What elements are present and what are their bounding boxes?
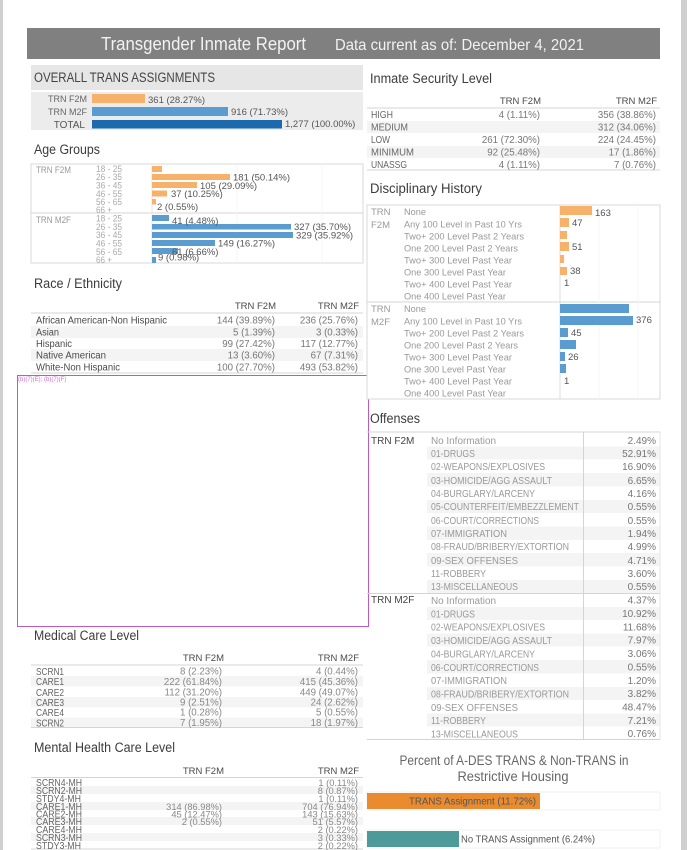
group: TRN M2F discipline: Two+ 200 Level Past 2 Years xyxy=(404,328,524,340)
table: medical care level: TRN F2M xyxy=(183,653,224,664)
group: TRN M2F discipline: Two+ 300 Level Past Year xyxy=(404,352,512,364)
group: TRN F2M ages xyxy=(36,164,290,216)
group: TRN F2M offenses: 2.49% xyxy=(628,436,656,447)
table: mental health care level: 2 (0.55%) xyxy=(182,817,222,827)
group: TRN M2F offenses: 4.37% xyxy=(628,596,656,606)
group: TRN F2M offenses: 11-ROBBERY xyxy=(431,569,486,580)
group: TRN M2F offenses: 10.92% xyxy=(622,609,656,620)
group: TRN F2M offenses: 02-WEAPONS/EXPLOSIVES xyxy=(431,462,545,473)
group: TRN F2M ages: 56 - 65 xyxy=(96,197,122,208)
table: race / ethnicity: 144 (39.89%) xyxy=(217,316,275,326)
group: TRN M2F ages: 9 (0.98%) xyxy=(158,252,199,264)
group: TRN F2M ages: 66 + xyxy=(96,205,112,216)
heading: percent in restrictive housing: Restrictive Housing xyxy=(458,769,568,784)
table: inmate security level: TRN M2F xyxy=(616,96,657,107)
table: medical care level: SCRN1 xyxy=(36,666,64,678)
table: mental health care level: 51 (5.57%) xyxy=(313,817,358,827)
group: TRN M2F discipline: M2F xyxy=(371,317,390,328)
group: TRN M2F discipline: 26 xyxy=(568,352,579,363)
group: TRN F2M offenses: 0.55% xyxy=(628,582,656,593)
table: medical care level: 5 (0.55%) xyxy=(316,708,358,718)
table: race / ethnicity: TRN M2F xyxy=(318,301,359,312)
heading: age groups: Age Groups xyxy=(34,142,100,157)
table: mental health care level: CARE3-MH xyxy=(36,816,82,828)
title banner xyxy=(27,28,660,59)
table: inmate security level: 224 (24.45%) xyxy=(598,135,656,146)
group: TRN F2M discipline: 51 xyxy=(572,242,583,253)
table: inmate security level: 4 (1.11%) xyxy=(499,160,540,171)
table: mental health care level: 143 (15.63%) xyxy=(302,810,358,820)
table: medical care level: 112 (31.20%) xyxy=(165,688,222,698)
group: TRN M2F offenses: 03-HOMICIDE/AGG ASSAULT xyxy=(431,636,552,647)
table: mental health care level: 1 (0.11%) xyxy=(318,794,358,804)
group: TRN F2M ages: 18 - 25 xyxy=(96,164,122,175)
table: inmate security level: LOW xyxy=(371,134,390,146)
group: TRN F2M offenses: 08-FRAUD/BRIBERY/EXTORTION xyxy=(431,542,569,553)
group: TRN F2M ages: 181 (50.14%) xyxy=(233,172,290,184)
group: TRN M2F offenses: 48.47% xyxy=(622,702,656,714)
table: medical care level: CARE4 xyxy=(36,707,64,719)
group: TRN F2M offenses: 6.65% xyxy=(628,476,656,487)
group: TRN M2F offenses: 11-ROBBERY xyxy=(431,716,486,727)
group: TRN M2F ages: 56 - 65 xyxy=(96,247,122,258)
table: mental health care level: TRN M2F xyxy=(318,766,359,777)
table: mental health care level: SCRN3-MH xyxy=(36,832,82,844)
group: TRN M2F offenses: 13-MISCELLANEOUS xyxy=(431,730,518,740)
group: TRN M2F discipline: TRN xyxy=(371,304,391,315)
table: race / ethnicity: African American-Non Hispanic xyxy=(36,316,167,326)
bar: TRN F2M: 361 (28.27%) xyxy=(148,95,205,106)
group: TRN F2M discipline xyxy=(371,206,611,302)
redacted area xyxy=(18,376,368,626)
group: TRN M2F ages: 26 - 35 xyxy=(96,222,122,233)
table: mental health care level: STDY4-MH xyxy=(36,793,81,805)
table: inmate security level: HIGH xyxy=(371,109,393,121)
bar: total: 1,277 (100.00%) xyxy=(285,119,355,130)
group: TRN F2M discipline: TRN xyxy=(371,207,391,218)
table: race / ethnicity: 236 (25.76%) xyxy=(300,316,358,326)
table: inmate security level: UNASSG xyxy=(371,159,407,171)
bar: no TRANS assignment: No TRANS Assignment (6.24%) xyxy=(461,834,595,846)
table: medical care level: 9 (2.51%) xyxy=(180,698,222,708)
group: TRN F2M discipline: Two+ 300 Level Past Year xyxy=(404,256,512,266)
group: TRN F2M discipline: 163 xyxy=(595,208,611,219)
heading: overall trans assignments: OVERALL TRANS ASSIGNMENTS xyxy=(34,70,215,85)
group: TRN F2M ages: 46 - 55 xyxy=(96,189,122,200)
group: TRN F2M discipline: 38 xyxy=(570,266,581,277)
table: inmate security level xyxy=(367,96,660,171)
group: TRN F2M offenses: 05-COUNTERFEIT/EMBEZZLEMENT xyxy=(431,502,579,513)
group: TRN F2M discipline: One 400 Level Past Year xyxy=(404,292,506,302)
group: TRN F2M discipline: None xyxy=(404,207,426,218)
group: TRN F2M offenses: 01-DRUGS xyxy=(431,449,475,460)
table: medical care level: 415 (45.36%) xyxy=(300,677,358,688)
group: TRN F2M ages: 26 - 35 xyxy=(96,172,122,183)
table: medical care level: 18 (1.97%) xyxy=(311,718,358,729)
bar chart: restrictive housing xyxy=(367,792,660,848)
group: TRN M2F discipline: One 300 Level Past Year xyxy=(404,364,506,376)
bar: TRANS assignment: TRANS Assignment (11.72%) xyxy=(409,796,536,808)
group: TRN F2M offenses: 0.55% xyxy=(628,516,656,527)
group: TRN F2M offenses: 13-MISCELLANEOUS xyxy=(431,582,518,593)
table: medical care level: 449 (49.07%) xyxy=(300,688,358,698)
table: mental health care level: CARE2-MH xyxy=(36,808,82,820)
panel: disciplinary history chart xyxy=(367,205,660,400)
group: TRN F2M discipline: One 300 Level Past Year xyxy=(404,268,506,278)
table: race / ethnicity: 5 (1.39%) xyxy=(233,328,275,338)
group: TRN M2F ages: 46 - 55 xyxy=(96,238,122,250)
table: inmate security level: 92 (25.48%) xyxy=(487,148,540,158)
group: TRN F2M offenses: 0.55% xyxy=(628,502,656,513)
table: inmate security level: 4 (1.11%) xyxy=(499,110,540,121)
bar: no TRANS assignment xyxy=(367,831,595,847)
group: TRN M2F offenses: TRN M2F xyxy=(371,595,414,606)
bar: TRANS assignment xyxy=(367,793,540,809)
group: TRN F2M ages: 2 (0.55%) xyxy=(157,202,198,213)
table: medical care level: 7 (1.95%) xyxy=(180,718,222,729)
bar: total xyxy=(54,119,355,131)
bar: TRN M2F xyxy=(48,107,288,118)
group: TRN M2F offenses: 3.82% xyxy=(628,689,656,700)
group: TRN M2F ages: TRN M2F xyxy=(36,215,71,226)
group: TRN F2M offenses xyxy=(371,436,656,593)
table: mental health care level: TRN F2M xyxy=(183,766,224,777)
bar: TRN M2F: TRN M2F xyxy=(48,107,87,117)
group: TRN M2F offenses: No Information xyxy=(431,596,496,607)
group: TRN F2M discipline: Any 100 Level in Past 10 Yrs xyxy=(404,220,522,230)
table: inmate security level: MINIMUM xyxy=(371,146,414,158)
group: TRN M2F discipline: Any 100 Level in Past 10 Yrs xyxy=(404,316,522,328)
group: TRN F2M discipline: 47 xyxy=(572,218,583,229)
group: TRN F2M discipline: Two+ 400 Level Past Year xyxy=(404,280,512,290)
table: mental health care level: CARE4-MH xyxy=(36,824,82,836)
group: TRN M2F offenses: 04-BURGLARY/LARCENY xyxy=(431,650,535,660)
group: TRN M2F offenses: 11.68% xyxy=(623,622,656,634)
group: TRN M2F discipline xyxy=(371,304,652,400)
group: TRN M2F ages xyxy=(36,214,353,266)
table: medical care level: CARE1 xyxy=(36,676,64,688)
heading: percent in restrictive housing: Percent of A-DES TRANS & Non-TRANS in xyxy=(400,753,628,768)
group: TRN F2M discipline: One 200 Level Past 2 Years xyxy=(404,244,518,254)
group: TRN M2F offenses: 02-WEAPONS/EXPLOSIVES xyxy=(431,622,545,634)
group: TRN F2M ages: 105 (29.09%) xyxy=(200,181,257,192)
group: TRN M2F discipline: 376 xyxy=(636,315,652,326)
table: inmate security level: MEDIUM xyxy=(371,122,408,134)
table: mental health care level: 3 (0.33%) xyxy=(318,833,358,843)
group: TRN M2F discipline: None xyxy=(404,304,426,315)
group: TRN F2M offenses: 3.60% xyxy=(628,569,656,580)
table: race / ethnicity: 67 (7.31%) xyxy=(311,350,358,362)
heading: offenses: Offenses xyxy=(370,411,420,426)
table: inmate security level: 356 (38.86%) xyxy=(598,110,656,121)
table: inmate security level: 7 (0.76%) xyxy=(614,160,656,171)
table: inmate security level: 312 (34.06%) xyxy=(598,122,656,134)
table: mental health care level: 314 (86.98%) xyxy=(166,802,222,812)
title banner: Data current as of: December 4, 2021 xyxy=(335,37,584,54)
heading: race / ethnicity: Race / Ethnicity xyxy=(34,276,122,291)
group: TRN M2F discipline: 1 xyxy=(564,376,569,387)
table: race / ethnicity: 493 (53.82%) xyxy=(300,362,358,374)
group: TRN M2F offenses: 7.21% xyxy=(628,716,656,727)
group: TRN M2F offenses: 07-IMMIGRATION xyxy=(431,676,507,687)
group: TRN M2F offenses: 01-DRUGS xyxy=(431,610,475,620)
table: medical care level: 4 (0.44%) xyxy=(316,666,358,678)
heading: disciplinary history: Disciplinary History xyxy=(370,181,482,196)
heading: medical care level: Medical Care Level xyxy=(34,628,139,643)
table: race / ethnicity xyxy=(31,301,363,374)
group: TRN M2F offenses: 1.20% xyxy=(628,676,656,687)
group: TRN F2M offenses: 16.90% xyxy=(622,462,656,473)
table: race / ethnicity: Hispanic xyxy=(36,339,72,350)
table: race / ethnicity: TRN F2M xyxy=(235,301,276,312)
table: inmate security level: TRN F2M xyxy=(500,96,541,107)
group: TRN F2M offenses: 07-IMMIGRATION xyxy=(431,529,507,540)
table: inmate security level: 261 (72.30%) xyxy=(482,135,540,146)
group: TRN M2F offenses: 3.06% xyxy=(628,649,656,660)
table: medical care level xyxy=(31,653,363,730)
group: TRN M2F offenses: 0.55% xyxy=(628,662,656,674)
table: medical care level: 8 (2.23%) xyxy=(180,666,222,678)
group: TRN M2F ages: 149 (16.27%) xyxy=(218,238,275,250)
table: mental health care level: SCRN2-MH xyxy=(36,785,82,797)
group: TRN M2F ages: 61 (6.66%) xyxy=(172,247,218,258)
group: TRN M2F ages: 41 (4.48%) xyxy=(172,216,218,227)
group: TRN M2F offenses xyxy=(371,595,656,740)
table: race / ethnicity: White-Non Hispanic xyxy=(36,362,120,374)
table: medical care level: TRN M2F xyxy=(318,653,359,664)
table: mental health care level: 704 (76.94%) xyxy=(302,802,358,812)
table: mental health care level xyxy=(31,766,363,850)
panel: overall trans assignments xyxy=(31,65,363,131)
group: TRN F2M offenses: 4.99% xyxy=(628,542,656,553)
table: race / ethnicity: 3 (0.33%) xyxy=(316,328,358,338)
table: race / ethnicity: 13 (3.60%) xyxy=(228,350,275,362)
group: TRN M2F ages: 66 + xyxy=(96,255,112,266)
group: TRN F2M discipline: Two+ 200 Level Past 2 Years xyxy=(404,232,524,242)
group: TRN M2F offenses: 0.76% xyxy=(628,729,656,740)
table: mental health care level: CARE1-MH xyxy=(36,801,82,813)
group: TRN F2M offenses: 4.16% xyxy=(628,489,656,500)
table: medical care level: 222 (61.84%) xyxy=(164,677,222,688)
group: TRN F2M offenses: 4.71% xyxy=(628,556,656,567)
heading: inmate security level: Inmate Security Level xyxy=(370,71,492,86)
group: TRN F2M offenses: 1.94% xyxy=(628,529,656,540)
table: mental health care level: 2 (0.22%) xyxy=(318,825,358,835)
title banner: Transgender Inmate Report xyxy=(101,34,306,54)
table: inmate security level: 17 (1.86%) xyxy=(609,148,656,158)
group: TRN M2F offenses: 7.97% xyxy=(628,636,656,646)
redacted area: (b)(7)(E); (b)(7)(F) xyxy=(18,377,66,383)
table: mental health care level: 8 (0.87%) xyxy=(318,786,358,796)
group: TRN F2M ages: 37 (10.25%) xyxy=(171,189,223,200)
group: TRN M2F discipline: 45 xyxy=(571,328,582,339)
table: race / ethnicity: 99 (27.42%) xyxy=(222,339,275,350)
panel: age groups chart xyxy=(31,164,363,266)
group: TRN F2M offenses: No Information xyxy=(431,436,496,447)
bar: TRN F2M xyxy=(48,94,205,106)
table: race / ethnicity: Native American xyxy=(36,350,106,362)
group: TRN F2M offenses: 09-SEX OFFENSES xyxy=(431,556,518,567)
group: TRN M2F ages: 36 - 45 xyxy=(96,230,122,241)
group: TRN M2F offenses: 06-COURT/CORRECTIONS xyxy=(431,663,539,674)
table: medical care level: 1 (0.28%) xyxy=(180,708,222,718)
group: TRN M2F ages: 327 (35.70%) xyxy=(294,222,351,233)
group: TRN F2M offenses: 03-HOMICIDE/AGG ASSAULT xyxy=(431,476,552,487)
bar: TRN M2F: 916 (71.73%) xyxy=(231,107,288,118)
heading: mental health care level: Mental Health Care Level xyxy=(34,740,175,755)
bar: TRN F2M: TRN F2M xyxy=(48,94,87,104)
table: race / ethnicity: Asian xyxy=(36,328,59,338)
table: mental health care level: 1 (0.11%) xyxy=(318,778,358,788)
group: TRN F2M discipline: 1 xyxy=(564,278,569,289)
table: medical care level: CARE3 xyxy=(36,697,64,709)
group: TRN M2F offenses: 08-FRAUD/BRIBERY/EXTORTION xyxy=(431,690,569,700)
group: TRN M2F ages: 18 - 25 xyxy=(96,214,122,224)
group: TRN F2M ages: 36 - 45 xyxy=(96,180,122,192)
heading: percent in restrictive housing xyxy=(400,753,628,784)
table: mental health care level: SCRN4-MH xyxy=(36,777,82,789)
table: mental health care level: 45 (12.47%) xyxy=(171,810,222,820)
group: TRN F2M discipline: F2M xyxy=(371,220,390,231)
group: TRN F2M offenses: 06-COURT/CORRECTIONS xyxy=(431,516,539,527)
table: medical care level: CARE2 xyxy=(36,687,64,699)
group: TRN M2F discipline: Two+ 400 Level Past Year xyxy=(404,376,512,388)
group: TRN F2M ages: TRN F2M xyxy=(36,165,71,176)
group: TRN M2F offenses: 09-SEX OFFENSES xyxy=(431,703,518,714)
table: race / ethnicity: 100 (27.70%) xyxy=(217,362,275,374)
bar: total: TOTAL xyxy=(54,120,85,131)
group: TRN F2M offenses: TRN F2M xyxy=(371,436,414,447)
group: TRN M2F discipline: One 200 Level Past 2 Years xyxy=(404,340,518,352)
table: race / ethnicity: 117 (12.77%) xyxy=(301,339,358,350)
group: TRN M2F ages: 329 (35.92%) xyxy=(296,230,353,242)
table: medical care level: SCRN2 xyxy=(36,718,64,730)
group: TRN F2M offenses: 04-BURGLARY/LARCENY xyxy=(431,489,535,500)
group: TRN M2F discipline: One 400 Level Past Year xyxy=(404,388,506,400)
table: offenses xyxy=(367,432,660,740)
group: TRN F2M offenses: 52.91% xyxy=(622,449,656,460)
table: medical care level: 24 (2.62%) xyxy=(311,698,358,708)
